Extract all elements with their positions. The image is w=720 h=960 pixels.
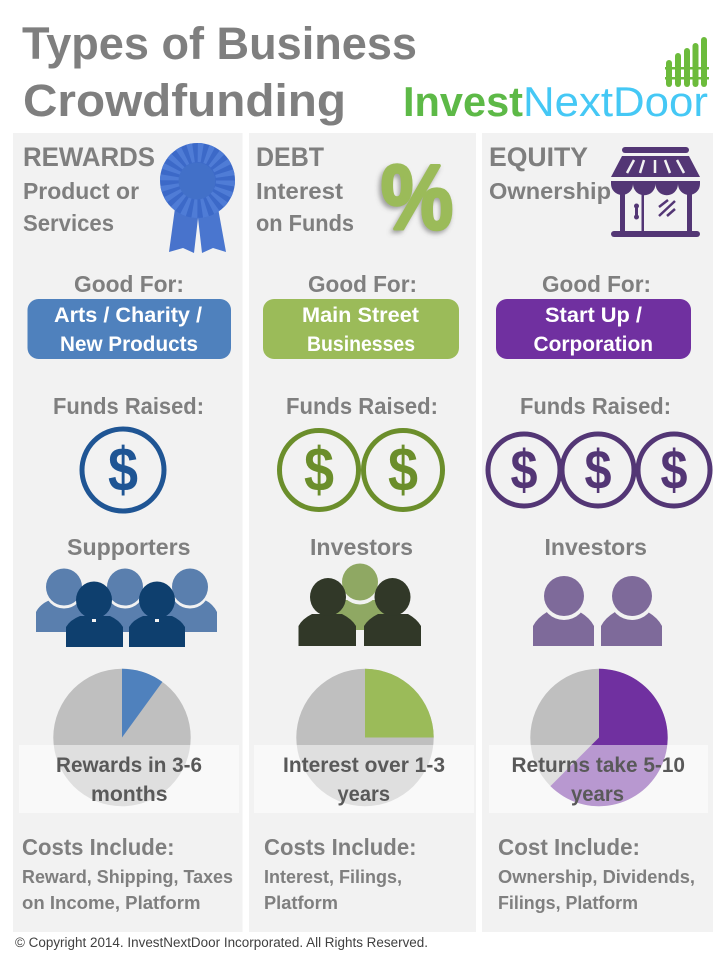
wordmark: NextDoor <box>523 78 708 125</box>
good for button: Businesses <box>307 333 415 356</box>
icon: blue ribbon <box>160 143 235 253</box>
costs <box>22 834 233 913</box>
callout: debt timing <box>254 745 474 813</box>
heading: debt <box>256 142 354 236</box>
good for label: Good For: <box>542 271 651 297</box>
icon: storefront <box>611 147 700 237</box>
icon: two investors <box>533 576 662 646</box>
icon: supporters group <box>36 568 217 647</box>
icon: investors group <box>298 564 421 646</box>
heading: debt: on Funds <box>256 210 354 236</box>
icon: percent sign: % <box>381 147 453 249</box>
investors label: Investors <box>310 534 413 560</box>
logo: InvestNextDoor <box>403 37 709 125</box>
icon: one dollar coin: $ <box>108 436 138 505</box>
title: Crowdfunding <box>23 75 346 126</box>
funds raised label: Funds Raised: <box>53 393 204 419</box>
costs: Cost Include: <box>498 834 640 860</box>
funds raised label: Funds Raised: <box>520 393 671 419</box>
title: Types of Business <box>22 18 417 69</box>
heading: rewards <box>23 142 155 236</box>
heading: rewards: Services <box>23 210 114 236</box>
funds raised label: Funds Raised: <box>286 393 438 419</box>
good for button <box>263 299 459 359</box>
callout: rewards timing <box>19 745 239 813</box>
icon: percent sign: % <box>378 150 452 252</box>
costs: Platform <box>264 892 338 913</box>
icon: one dollar coin <box>82 429 164 511</box>
wordmark: Invest <box>403 78 523 125</box>
costs: Reward, Shipping, Taxes <box>22 866 233 887</box>
costs: Interest, Filings, <box>264 866 402 887</box>
good for button: Start Up / <box>545 304 642 327</box>
good for button: Main Street <box>302 304 419 327</box>
copyright: © Copyright 2014. InvestNextDoor Incorporated. All Rights Reserved. <box>15 935 428 950</box>
panel: rewards <box>13 133 242 932</box>
good for button: New Products <box>60 333 198 356</box>
pie chart: 62.5 percent <box>530 669 668 806</box>
icon: two dollar coins: $ <box>388 436 418 505</box>
heading: rewards: REWARDS <box>23 142 155 172</box>
costs: on Income, Platform <box>22 892 200 913</box>
heading: debt: Interest <box>256 178 343 204</box>
heading: equity: Ownership <box>489 178 611 204</box>
callout: debt timing: Interest over 1-3 <box>283 753 445 777</box>
costs: Ownership, Dividends, <box>498 866 695 887</box>
icon: three dollar coins: $ <box>510 438 538 501</box>
icon: fence <box>665 37 709 87</box>
good for button: Arts / Charity / <box>54 304 202 327</box>
costs <box>264 834 416 913</box>
panel: debt <box>249 133 476 932</box>
callout: debt timing: years <box>338 782 390 806</box>
good for button <box>28 299 231 359</box>
heading: debt: DEBT <box>256 142 324 172</box>
costs <box>498 834 695 913</box>
callout: equity timing <box>489 745 708 813</box>
icon: two dollar coins: $ <box>304 436 334 505</box>
icon: three dollar coins: $ <box>584 438 612 501</box>
good for button <box>496 299 691 359</box>
icon: three dollar coins: $ <box>660 438 688 501</box>
good for button: Corporation <box>534 333 653 356</box>
pie chart: 10 percent <box>53 669 191 806</box>
callout: rewards timing: Rewards in 3-6 <box>56 753 202 777</box>
callout: equity timing: Returns take 5-10 <box>512 753 685 777</box>
callout: equity timing: years <box>571 782 624 806</box>
heading: rewards: Product or <box>23 178 139 204</box>
title <box>22 18 417 126</box>
panel: equity <box>482 133 713 932</box>
costs: Costs Include: <box>264 834 416 860</box>
investors label: Investors <box>544 534 647 560</box>
callout: rewards timing: months <box>91 782 168 806</box>
supporters label: Supporters <box>67 534 190 560</box>
icon: three dollar coins <box>488 434 710 506</box>
costs: Costs Include: <box>22 834 174 860</box>
good for label: Good For: <box>308 271 417 297</box>
pie chart: 25 percent <box>296 669 434 806</box>
icon: two dollar coins <box>280 430 442 510</box>
heading: equity: EQUITY <box>489 142 588 172</box>
costs: Filings, Platform <box>498 892 638 913</box>
heading: equity <box>489 142 611 204</box>
good for label: Good For: <box>74 271 184 297</box>
